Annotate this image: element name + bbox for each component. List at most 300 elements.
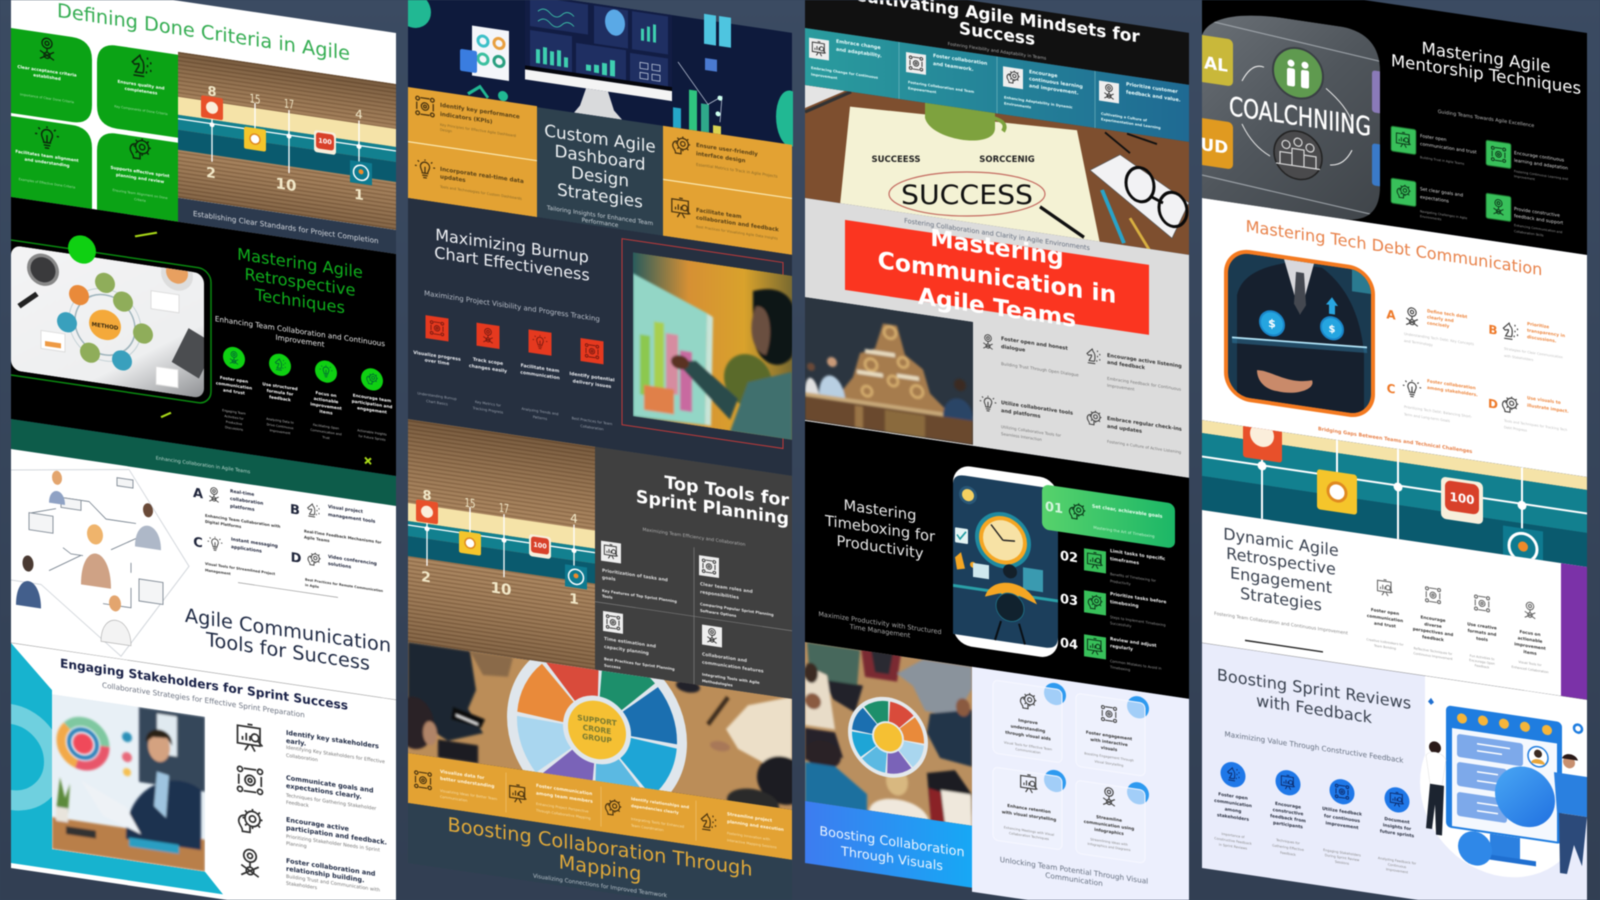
item 2: expectations clearly. — [286, 782, 362, 801]
item: actionable items: Enhanced Collaboration — [1512, 665, 1548, 674]
item: regular check-ins: and updates — [1107, 424, 1142, 435]
column 3 — [804, 0, 1189, 900]
cell: embrace change — [809, 35, 882, 87]
item: delivery issues: delivery issues — [573, 378, 612, 390]
item: actionable items: Focus on — [1520, 629, 1540, 637]
panel: orange left: updates — [440, 174, 466, 184]
item: regular check-ins — [1087, 410, 1182, 455]
title: Mastering — [844, 497, 916, 524]
item: open communication: communication and trust — [1420, 141, 1477, 156]
cell: visualize data — [415, 765, 498, 807]
cell: embrace change: Improvement — [811, 72, 838, 80]
item: actionable items: Visual Tools for — [1518, 660, 1542, 667]
item: collaboration features: communication features — [702, 660, 764, 675]
step 03: timeboxing — [1110, 599, 1139, 609]
panel: supports sprint planning: planning and review — [116, 172, 164, 184]
item 3: Planning — [286, 841, 307, 850]
timeline image: 1 — [569, 591, 579, 608]
item: structured formula: Improvement — [270, 428, 291, 435]
item: diverse perspectives: diverse — [1424, 621, 1442, 629]
card: infographics: Streamline — [1096, 814, 1122, 823]
slide: Dynamic Agile Retrospective Engagement Strategies — [1202, 510, 1587, 700]
step 01 card — [1042, 484, 1175, 549]
cell: prioritize customer: Prioritize customer — [1126, 82, 1178, 95]
panel: ensures quality: completeness — [125, 86, 158, 96]
timeline image: 17 — [284, 96, 294, 112]
item: open dialogue: dialogue — [1001, 344, 1026, 354]
item: continuous learning: Improvement — [1514, 174, 1536, 181]
item: foster open: and trust — [1374, 620, 1396, 629]
item 1 — [236, 722, 386, 764]
title: Success — [959, 19, 1035, 50]
panel: ensures quality: Ensures quality and — [118, 79, 164, 91]
photo: person at data wall — [633, 252, 796, 441]
item: creative formats: Fun Activities to — [1470, 654, 1494, 661]
item: collaborative tools: and platforms — [1001, 408, 1040, 420]
cell: foster collaboration: and teamwork. — [933, 61, 974, 73]
title: Mastering Agile — [1422, 39, 1550, 77]
subtitle: Improvement — [275, 333, 325, 349]
item: foster open: Team Bonding — [1373, 643, 1396, 651]
step 03 — [1060, 584, 1166, 633]
step 04 — [1060, 629, 1161, 677]
panel: orange right: Best Practices for Visualizing Agile Data Insights — [696, 225, 778, 241]
item: constructive feedback: Enhancing Communication and — [1514, 223, 1562, 234]
panel: glass cards — [972, 667, 1189, 900]
panel: top tools: Sprint Planning — [636, 487, 789, 530]
item 3: Encourage active — [286, 816, 350, 833]
card: interactive visuals: visuals — [1101, 745, 1118, 752]
panel: supports sprint planning: Ensuring Team Alignment on Done — [112, 188, 168, 200]
panel subtitle: Unlocking Team Potential Through Visual — [1000, 855, 1148, 886]
panel: facilitates team alignment: and understanding — [25, 157, 69, 168]
photo: coaching board: COALCHNIING — [1229, 92, 1371, 143]
item D — [291, 552, 384, 592]
item: diverse perspectives — [1413, 585, 1453, 661]
slide: Boosting Sprint Reviews with Feedback — [1202, 643, 1587, 900]
step 04: 04 — [1060, 636, 1078, 653]
item: encourage participation: Encourage team — [353, 393, 392, 403]
photo: support group wheel — [394, 610, 809, 851]
item: foster open: among — [1225, 807, 1241, 815]
photo: support group wheel: CRORE — [583, 723, 611, 736]
card: visual aids: Visual Tools for Effective Team — [1004, 740, 1052, 752]
title: Retrospective — [1226, 544, 1336, 579]
card: visual aids: understanding — [1011, 723, 1045, 734]
panel: orange left: Identify key performance — [440, 103, 520, 121]
item: track scope: changes easily — [469, 363, 507, 375]
item: open dialogue: Foster open and honest — [1001, 336, 1068, 352]
item: document insights: insights for — [1383, 822, 1412, 833]
cell: prioritize customer: Cultivating a Culture of — [1101, 112, 1147, 123]
item B — [1488, 315, 1565, 367]
item: foster open: Engaging Team — [222, 408, 246, 416]
cell: streamline planning: Interactive Mapping Sessions — [727, 838, 777, 850]
card: interactive visuals: with interactive — [1090, 737, 1128, 747]
cell: prioritize customer: Experimentation and Learning — [1101, 117, 1161, 130]
timeline image: 17 — [499, 501, 509, 516]
title: Communication in — [878, 246, 1116, 309]
item: constructive feedback: feedback from — [1270, 813, 1306, 824]
item: constructive feedback: participants — [1273, 820, 1303, 830]
purple side bar — [1561, 563, 1587, 700]
cell: prioritize customer — [1099, 78, 1181, 133]
title band: Visualizing Connections for Improved Teamwork — [533, 874, 668, 899]
item: collaborative tools: Utilizing Collaborative Tools for — [1001, 424, 1061, 438]
item 4 — [240, 848, 380, 892]
item: actionable items: Communication and — [310, 428, 342, 436]
panel: orange right — [663, 126, 792, 255]
item: foster open: communication — [216, 380, 252, 391]
item: actionable items — [1512, 600, 1548, 674]
item B: Real-Time Feedback Mechanisms for — [304, 528, 382, 545]
item A: and Terminology — [1404, 339, 1433, 347]
cell: embrace change: Embracing Change for Continuous — [811, 66, 878, 80]
item: clear team roles: responsibilities — [700, 589, 739, 601]
slide: Boosting Collaboration Through Visuals — [804, 640, 1189, 900]
subtitle: Maximizing Project Visibility and Progress Tracking — [424, 288, 600, 323]
slide: Top Tools for Sprint Planning — [408, 419, 792, 699]
item: visualize progress: Visualize progress — [413, 350, 461, 363]
item: foster open — [216, 344, 252, 433]
cell: encourage learning: Encourage — [1029, 69, 1058, 79]
panel: orange left: indicators (KPIs) — [440, 112, 493, 126]
item: prioritization — [601, 541, 677, 609]
item: collaboration features: Collaboration and — [702, 652, 747, 664]
item D: Debt Progress — [1504, 425, 1527, 433]
item: structured formula: Use structured — [262, 381, 298, 391]
clock illustration card — [953, 464, 1058, 659]
card: visual storytelling — [993, 761, 1066, 851]
panel: orange right: interface design — [696, 151, 746, 164]
item 1: Collaboration — [286, 753, 318, 763]
cell: identify relationships: dependencies clearly — [631, 803, 679, 815]
item: creative formats: tools — [1476, 636, 1488, 642]
item: constructive feedback — [1486, 193, 1563, 240]
item: continuous learning: Encourage continuous — [1514, 150, 1565, 164]
item: diverse perspectives: Continuous Improvement — [1413, 651, 1453, 661]
item A: concisely — [1427, 320, 1449, 330]
sketch people illustration — [10, 468, 190, 657]
cell: foster communication — [510, 779, 593, 821]
item: utilize feedback: During Sprint Review — [1325, 853, 1360, 862]
item B: with Stakeholders — [1504, 354, 1534, 362]
subtitle: Fostering Team Collaboration and Continuous Improvement — [1214, 611, 1348, 637]
decorative green circle — [68, 233, 96, 266]
item C: C — [193, 535, 203, 551]
step 02: Limit tasks to specific — [1110, 548, 1166, 562]
photo: gear pile meeting — [805, 297, 973, 445]
item: clear team roles — [699, 555, 774, 624]
item 4: relationship building. — [286, 865, 364, 884]
item: collaborative tools: Seamless Interaction — [1001, 431, 1042, 442]
item: creative formats: Feedback — [1475, 663, 1490, 670]
subtitle: Maximizing Value Through Constructive Feedback — [1225, 729, 1404, 765]
item: constructive feedback: Feedback — [1280, 851, 1296, 857]
item: active listening: and feedback — [1107, 360, 1146, 371]
item: foster open: Discussions — [225, 425, 243, 432]
item C: Term and Long-term Goals — [1403, 412, 1450, 423]
step 02: timeframes — [1110, 556, 1139, 566]
subtitle: Guiding Teams Towards Agile Excellence — [1438, 109, 1534, 129]
illustration: review dashboard — [1420, 675, 1587, 889]
item: actionable items: Trust — [321, 435, 331, 440]
squiggle accents — [135, 229, 371, 464]
item D: Best Practices for Remote Communication — [305, 578, 384, 593]
title band — [408, 803, 792, 900]
card: interactive visuals: Foster engagement — [1086, 730, 1132, 741]
subtitle: Fostering Flexibility and Adaptability in Teams — [948, 41, 1047, 62]
item: foster open: Creative Icebreakers for — [1366, 637, 1404, 647]
column 1 — [0, 0, 396, 900]
item: visualize progress: over time — [425, 357, 449, 367]
timeline image: 2 — [206, 165, 216, 182]
item C: among stakeholders. — [1427, 385, 1478, 398]
title: Strategies — [1240, 584, 1322, 615]
item: constructive feedback: Collaboration Skills — [1514, 229, 1544, 238]
item: document insights: Analyzing Feedback for — [1378, 856, 1417, 866]
cell: streamline planning: planning and execution — [727, 819, 784, 833]
slide: Maximizing Burnup Chart Effectiveness — [408, 198, 796, 476]
timeline image — [178, 52, 396, 230]
item C: Management — [205, 568, 231, 576]
panel subtitle: Communication — [1045, 871, 1103, 888]
item: document insights: future sprints — [1380, 828, 1414, 839]
item: encourage participation: participation and — [352, 398, 392, 409]
item: actionable items — [310, 358, 342, 442]
timeline image: 4 — [570, 511, 578, 526]
card: visual storytelling: Collaboration Techniques — [1009, 831, 1049, 841]
item: open communication — [1391, 126, 1477, 168]
item: open dialogue — [983, 333, 1079, 378]
title: Mentorship Techniques — [1391, 51, 1581, 98]
panel: clear acceptance criteria: Clear acceptance criteria — [17, 64, 77, 78]
item: encourage participation: Actionable Insights — [357, 428, 387, 437]
photo: circle of people around wheel — [804, 640, 972, 828]
item: actionable items: items — [1523, 649, 1537, 656]
item: collaborative tools: Utilize collaborative tools — [1001, 400, 1073, 417]
column 2 — [394, 0, 809, 900]
item C: Instant messaging — [231, 537, 278, 549]
item: delivery issues: Best Practices for Team — [572, 416, 613, 426]
step 01 card: 01 — [1045, 500, 1063, 517]
item: foster open: Productive — [226, 420, 242, 426]
item: active listening — [1087, 348, 1182, 399]
step 04: regularly — [1110, 643, 1133, 653]
item B: Prioritize — [1527, 321, 1549, 330]
cell: foster communication: Through Collaborative Mapping — [535, 808, 591, 821]
item D: D — [291, 550, 302, 567]
item C: C — [1387, 381, 1396, 397]
card: infographics: Infographics and Diagrams — [1087, 842, 1131, 852]
item: constructive feedback — [1270, 768, 1306, 858]
title: Mastering Tech Debt Communication — [1246, 217, 1542, 279]
item: track scope: Track scope — [473, 357, 503, 367]
card: interactive visuals: Boosting Engagement Through — [1084, 751, 1134, 763]
item: facilitate team communication: Patterns — [533, 415, 547, 421]
timeline image: 10 — [491, 578, 511, 599]
timeline image — [408, 419, 598, 670]
item: foster open — [1366, 577, 1404, 652]
item: time estimation: Success — [604, 664, 621, 670]
desk method diagram image — [10, 246, 205, 398]
caption band: Establishing Clear Standards for Project Completion — [193, 209, 379, 245]
item: foster open: in Sprint Reviews — [1219, 843, 1247, 851]
timeline image: 2 — [421, 569, 431, 586]
subtitle: Fostering Collaboration and Clarity in Agile Environments — [904, 217, 1090, 252]
item: continuous learning: learning and adaptation — [1514, 158, 1568, 172]
step 03: Prioritize tasks before — [1110, 591, 1166, 605]
item: regular check-ins: Fostering a Culture of Active Listening — [1107, 439, 1182, 455]
item: collaboration features — [702, 625, 764, 692]
item: constructive feedback: constructive — [1273, 807, 1303, 817]
item A: Define tech debt — [1427, 308, 1467, 320]
photo: coaching board: IUD — [1194, 134, 1228, 159]
panel: facilitates team alignment: Examples of Effective Done Criteria — [19, 177, 75, 190]
photo: success notebook: SORCCENIG — [979, 155, 1035, 165]
subtitle: Collaborative Strategies for Effective Sprint Preparation — [102, 681, 305, 720]
blue title block: Boosting Collaboration — [819, 824, 965, 861]
item: actionable items: improvement — [1514, 641, 1546, 651]
subtitle: Maximize Productivity with Structured — [818, 610, 942, 636]
item: foster open: communication — [1214, 798, 1252, 809]
item: constructive feedback: Techniques for — [1275, 838, 1301, 846]
panel: orange right: Essential Metrics to Track in Agile Projects — [696, 162, 778, 179]
timeline image: 100 — [318, 137, 332, 147]
item A: Real-time — [230, 488, 254, 498]
item: actionable items: actionable — [314, 396, 339, 404]
item: time estimation — [603, 611, 675, 678]
item: clear goals: expectations — [1420, 194, 1450, 205]
item 3: participation and feedback. — [286, 824, 387, 847]
item A: A — [193, 486, 204, 503]
step 02: Benefits of Timeboxing for — [1110, 572, 1156, 583]
slide: Mastering Tech Debt Communication — [1202, 198, 1587, 477]
card: infographics: infographics — [1094, 827, 1124, 836]
item A: Understanding Tech Debt: Key Concepts — [1404, 332, 1474, 346]
item: creative formats: Encourage Open — [1469, 658, 1495, 666]
item: constructive feedback: Provide constructive — [1514, 206, 1560, 219]
item: foster open: Constructive Feedback — [1214, 836, 1252, 846]
cell: visualize data: better understanding — [440, 776, 494, 790]
item: active listening: Encourage active listening — [1107, 353, 1182, 370]
item: utilize feedback: for continuous — [1324, 813, 1360, 824]
item 4: Stakeholders — [286, 881, 318, 891]
slide: Mastering Timeboxing for Productivity — [805, 421, 1189, 699]
item: document insights: Document — [1384, 816, 1410, 826]
item A: collaboration — [230, 496, 263, 507]
title: with Feedback — [1256, 691, 1373, 727]
item: clear goals: Set clear goals and — [1420, 186, 1463, 199]
card: visual aids — [993, 674, 1066, 764]
item D: solutions — [328, 561, 351, 570]
item C: applications — [231, 544, 262, 555]
item B: management tools — [328, 512, 376, 525]
title: Engagement — [1230, 563, 1332, 597]
timeline image: 1 — [354, 187, 364, 204]
teal diagonal shape — [0, 637, 223, 894]
timeline image: 15 — [250, 91, 261, 107]
photo: success notebook: SUCCEESS — [872, 155, 920, 165]
item: clear goals — [1391, 178, 1467, 225]
panel: facilitates team alignment — [11, 116, 92, 209]
item: constructive feedback: Encourage — [1275, 801, 1301, 811]
item 4: Building Trust and Communication with — [286, 874, 380, 894]
item: foster open: Activities for — [224, 414, 244, 421]
panel: center title: Custom Agile — [544, 120, 656, 157]
orange subtitle: Bridging Gaps Between Teams and Technical Challenges — [1318, 426, 1472, 455]
step 04: Review and adjust — [1110, 636, 1157, 649]
item 1: Identify key stakeholders — [286, 729, 379, 750]
item: active listening: Improvement — [1107, 383, 1135, 392]
card: infographics: Streamlining Ideas with — [1090, 837, 1128, 847]
blue title block — [805, 801, 972, 888]
desk method diagram image: METHOD — [92, 322, 119, 332]
cell: encourage learning — [1003, 65, 1083, 117]
item: encourage participation: for Future Sprints — [359, 434, 386, 442]
panel: clear acceptance criteria — [11, 28, 92, 125]
cell: foster collaboration — [906, 49, 988, 102]
item: foster open: Foster open — [1218, 791, 1248, 802]
item: open communication: Foster open — [1420, 133, 1447, 143]
item C: Foster collaboration — [1427, 378, 1476, 391]
dashboard illustration — [407, 0, 794, 147]
card: interactive visuals — [1076, 687, 1149, 777]
card: visual storytelling: Enhance retention — [1007, 803, 1051, 814]
item A: Enhancing Team Collaboration with — [205, 513, 281, 529]
timeline image: 4 — [355, 107, 363, 122]
blue title block: Through Visuals — [840, 844, 943, 874]
item 2: Communicate goals and — [286, 774, 374, 795]
item 1: early. — [286, 737, 306, 748]
title: Maximizing Burnup — [435, 225, 589, 267]
panel: orange left: Tools and Technologies for Custom Dashboards — [439, 185, 522, 201]
item C — [193, 536, 278, 576]
panel: center title: Design — [571, 162, 629, 191]
step 04: Common Mistakes to Avoid in — [1110, 659, 1161, 671]
item: clear team roles: Comparing Popular Sprint Planning — [700, 602, 774, 617]
panel: clear acceptance criteria: established — [33, 72, 61, 81]
item: encourage participation — [352, 365, 392, 443]
cell: visualize data: Communication — [440, 795, 467, 803]
item: prioritization: goals — [602, 575, 616, 583]
item D: Video conferencing — [328, 554, 377, 567]
panel: center title: Tailoring Insights for Enhanced Team — [546, 205, 653, 227]
item: actionable items: improvement — [310, 401, 342, 411]
item: time estimation: capacity planning — [604, 644, 649, 657]
panel: orange right: collaboration and feedback — [696, 215, 779, 233]
item: document insights: Continuous — [1388, 863, 1407, 869]
item D — [1488, 389, 1569, 439]
item B: Visual project — [328, 504, 364, 515]
item: utilize feedback: Utilize feedback — [1322, 806, 1363, 818]
step 01 card: Mastering the Art of Timeboxing — [1093, 525, 1155, 539]
item: foster open: Importance of — [1222, 832, 1245, 839]
item A: Digital Platforms — [205, 519, 242, 529]
panel: orange left: Key Principles for Effective Agile Dashboard — [440, 123, 516, 138]
item: creative formats: Use creative — [1467, 621, 1497, 631]
item: actionable items: actionable — [1518, 635, 1543, 644]
slide: Mastering Agile Retrospective Techniques — [0, 194, 396, 506]
item: active listening: Embracing Feedback for Continuous — [1107, 376, 1181, 392]
cell: visualize data: Visualizing Ideas for Better Team — [440, 789, 498, 801]
step 02: Productivity — [1110, 579, 1131, 586]
item: prioritization: Key Features of Top Sprint Planning — [602, 589, 677, 604]
title: Retrospective — [245, 265, 355, 300]
timeline image: 8 — [422, 488, 432, 504]
title: Mastering — [930, 224, 1064, 271]
item: constructive feedback: feedback and support — [1514, 213, 1563, 226]
